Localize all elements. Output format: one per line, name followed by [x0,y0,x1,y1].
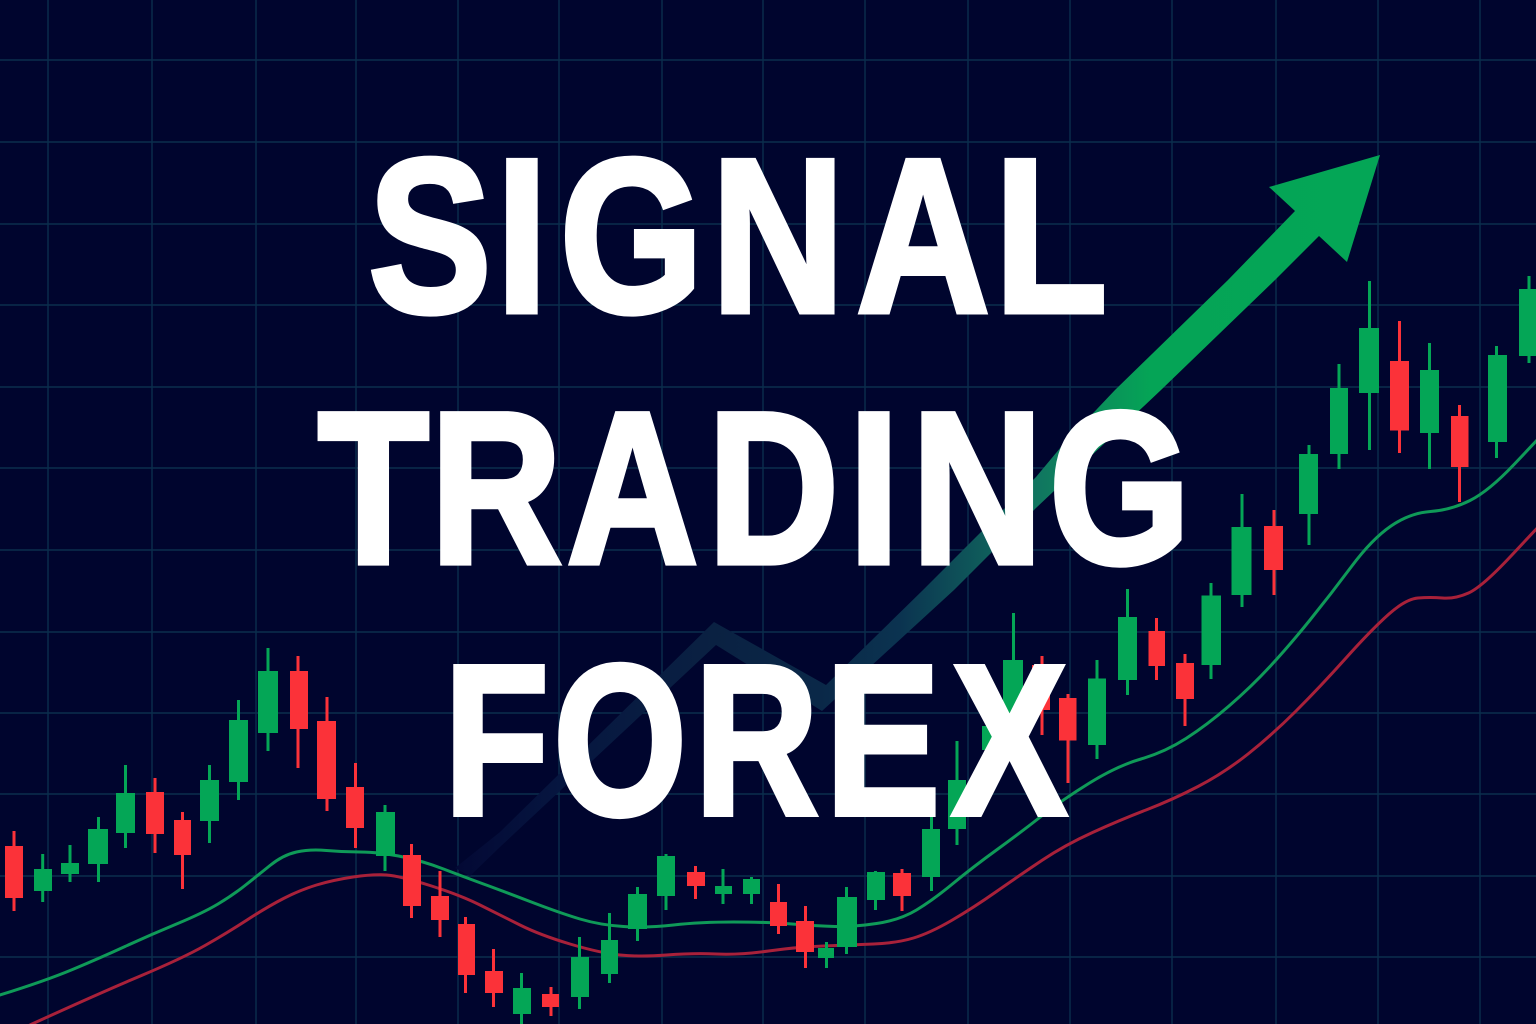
arrow: rising green trend arrow fading into a dark trail [455,155,1380,876]
candlesticks: right section [1032,276,1536,783]
moving average line: red [20,525,1536,1024]
moving average line: green [0,437,1536,995]
title [318,113,1190,860]
candlesticks: middle section [513,613,1023,1024]
title line: FOREX: FOREX [444,622,1067,860]
title line: TRADING: TRADING [318,368,1190,609]
title line: SIGNAL: SIGNAL [369,113,1107,358]
candlesticks: left section [5,648,503,1007]
